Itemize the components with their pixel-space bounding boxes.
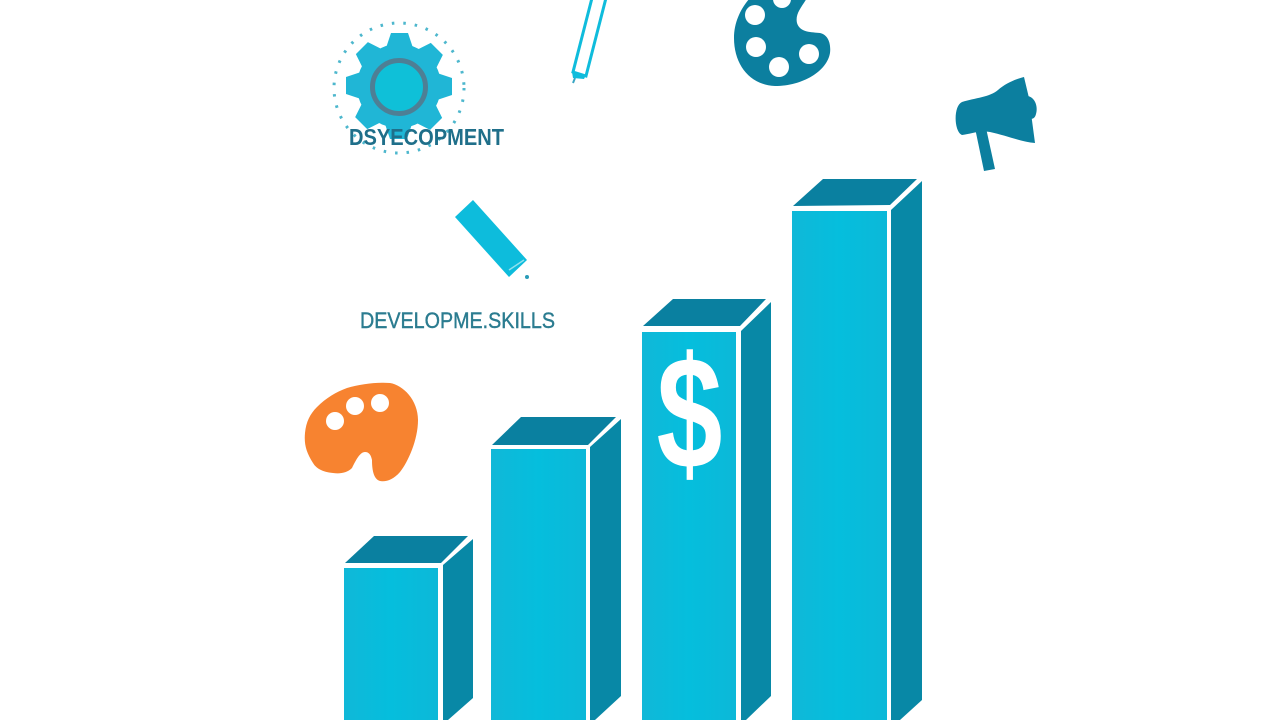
bar chart: rising 3D bars <box>344 179 922 720</box>
megaphone handle <box>975 128 995 171</box>
icon: cyan marker <box>455 200 529 279</box>
gear centre ring <box>372 60 426 114</box>
skills label: DEVELOPME.SKILLS <box>360 308 555 333</box>
icon: orange palette <box>305 383 418 481</box>
gear <box>346 33 452 139</box>
megaphone back cap <box>1028 96 1037 119</box>
bar 4 <box>792 179 922 720</box>
development label: DSYECOPMENT <box>349 124 504 150</box>
icon: teal palette <box>734 0 830 86</box>
icon: megaphone <box>956 77 1037 171</box>
dollar sign: $ <box>657 324 722 502</box>
megaphone body <box>956 77 1035 143</box>
icon: gear with development label <box>334 23 504 153</box>
bar 1 <box>344 536 473 720</box>
icon: pencil outline <box>572 0 606 83</box>
bar 3 with dollar sign <box>642 299 771 720</box>
bar 2 <box>491 417 621 720</box>
dotted ring around gear <box>334 23 464 153</box>
